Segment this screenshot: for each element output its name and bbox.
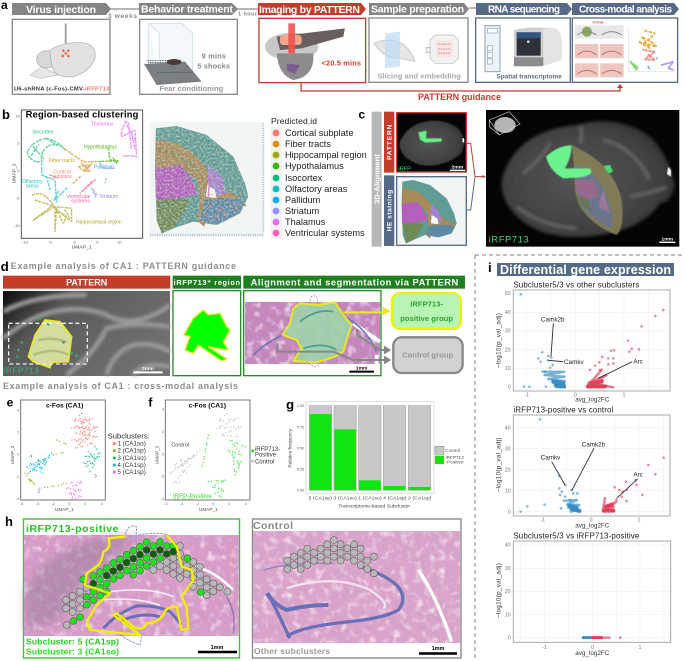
chamber protocol text: 9 mins [202, 52, 226, 61]
step header: RNA sequencing: RNA sequencing [488, 4, 560, 16]
label: iRFP-Positive: iRFP-Positive [173, 493, 212, 500]
volcano plot 3: 0 [591, 645, 594, 651]
legend: predicted id [271, 116, 367, 239]
UMAP plot: -5 [48, 240, 53, 245]
legend: subclusters: 4 (CA1sp) [117, 462, 146, 469]
UMAP plot [11, 109, 143, 250]
volcano plot 1: 0 [508, 384, 511, 390]
panel e: c-Fos UMAP by subcluster: 0 [17, 453, 19, 457]
panel f: c-Fos UMAP by group: 0 [162, 452, 164, 456]
icon: imaging device with laser beam [265, 23, 345, 80]
red points [603, 458, 664, 512]
panel letter c: c [358, 108, 365, 122]
UMAP plot: Region-based clustering [26, 109, 139, 119]
legend: predicted id: Ventricular systems [285, 228, 365, 238]
cluster numbers: 2 [37, 488, 40, 494]
volcano plot 1: 10 [505, 366, 511, 372]
cluster labels: Hippocampal region [76, 220, 122, 226]
cluster labels: Fiber tracts [49, 158, 75, 164]
legend: subclusters: Subclusters: [108, 432, 150, 441]
cluster labels: Striatum [99, 194, 118, 200]
scale bar [419, 646, 457, 654]
cluster labels: Olfactory [22, 179, 43, 185]
gene callouts: Camk2b [582, 442, 606, 449]
panel f: c-Fos UMAP by group: c-Fos (CA1) [189, 403, 226, 410]
volcano plot 3: −log10(p_val_adj) [496, 563, 503, 618]
UMAP plot: 0 [17, 168, 20, 173]
scale bar: 1mm [432, 646, 445, 652]
UMAP plot: -10 [14, 223, 20, 228]
panel g: relative frequency bars: 0.50 [297, 447, 304, 451]
box: virus injection [12, 19, 110, 94]
image: PATTERN volume: iRFP [398, 167, 411, 173]
panel e: c-Fos UMAP by subcluster: UMAP_2 [10, 445, 15, 464]
volcano plot 2: −log10(p_val_adj) [496, 437, 503, 492]
fiber tracts cluster [65, 149, 93, 185]
cluster labels: Cortical [53, 170, 71, 176]
panel f: c-Fos UMAP by group [148, 396, 250, 512]
legend: predicted id: Fiber tracts [285, 139, 331, 149]
legend: predicted id: Pallidum [285, 195, 321, 205]
image: PATTERN close-up [3, 291, 170, 376]
legend: subclusters: 3 (CA1so) [117, 455, 146, 462]
box: cross-modal analysis [572, 18, 678, 82]
scatter: subclusters [25, 413, 100, 500]
cluster labels [22, 121, 122, 226]
legend: predicted id: Striatum [285, 206, 320, 216]
icon: spatial slide [485, 26, 500, 72]
box: behavior treatment: 5 shocks [197, 62, 230, 71]
blue points [583, 633, 593, 642]
tissue image: iRFP713-positive [24, 535, 239, 636]
volcano plot 1 [496, 281, 670, 404]
panel g: relative frequency bars: Transcriptome-based Subcluster [338, 503, 411, 509]
image: merged 3D view [486, 110, 679, 247]
panel e: c-Fos UMAP by subcluster: -4 [16, 497, 19, 501]
legend: group colours [435, 446, 464, 465]
tissue image: control [253, 531, 460, 643]
hippocampal cluster [33, 194, 72, 232]
cluster labels: Hypothalamus [84, 145, 117, 151]
volcano plot 1: 0 [574, 393, 577, 399]
volcano plot 1: 20 [505, 347, 511, 353]
arrows: gray to control group [277, 329, 391, 364]
icon: mouse brain with injection needle [30, 23, 95, 78]
legend: group: Control [255, 459, 274, 465]
gene callouts: Camkv [541, 455, 561, 462]
cortical subplate and ventricular [50, 175, 95, 193]
image: PATTERN close-up: 2mm [142, 366, 154, 372]
step header: virus injection [12, 3, 111, 16]
dashed region outline [120, 526, 168, 645]
thalamus cluster [121, 122, 137, 157]
volcano plot 1: 1 [623, 393, 626, 399]
image: PATTERN volume [397, 113, 466, 173]
volcano plot 1: -1 [524, 393, 529, 399]
bar: HE staining: HE staining [387, 190, 394, 231]
step header: imaging by PATTERN: Imaging by PATTERN [259, 4, 360, 16]
scale bar [349, 369, 374, 375]
legend: subclusters: 5 (CA1sp) [117, 469, 146, 476]
legend: group: iRFP713- [255, 447, 280, 453]
bar: HE staining [384, 175, 394, 246]
volcano plot 2: 30 [505, 446, 511, 452]
gene callouts: Arc [633, 471, 643, 478]
legend: subclusters: 1 (CA1so) [117, 441, 146, 448]
caption: other subclusters: Other subclusters [254, 646, 330, 656]
isocortex cluster [27, 138, 65, 162]
interval label: 3 weeks: 3 weeks [108, 13, 137, 20]
header: PATTERN [3, 276, 170, 289]
legend: predicted id: Cortical subplate [285, 128, 353, 138]
panel g: relative frequency bars: 0.00 [297, 489, 304, 493]
panel f: c-Fos UMAP by group: -2 [196, 502, 199, 506]
image: merged 3D view: 1mm [661, 237, 674, 243]
step header: cross-modal analysis: Cross-modal analysis [579, 4, 672, 16]
panel g: relative frequency bars: g [286, 397, 294, 412]
panel e: c-Fos UMAP by subcluster [7, 396, 105, 512]
box: control group: Control group [402, 351, 453, 360]
header: iRFP713 region: iRFP713⁺ region [174, 278, 240, 287]
subcluster labels [26, 636, 119, 656]
bar: 3D-Alignment: 3D-Alignment [372, 154, 381, 204]
gene callouts: Camkv [564, 359, 585, 366]
legend: subclusters: 2 (CA1sp) [117, 448, 146, 455]
legend: subclusters [108, 432, 150, 476]
volcano plot 2: avg_log2FC [575, 523, 610, 530]
heading: Differential gene expression [500, 263, 671, 277]
panel letter i: i [488, 260, 492, 275]
volcano plot 2: -1 [540, 518, 545, 524]
panel g: relative frequency bars: 5 (CA1sp) 3 (CA1so) 1 (CA1so) 4 (CA1sp) 2 (CA1sp) [309, 496, 432, 502]
caption: slicing and embedding: Slicing and embedding [377, 71, 461, 80]
UMAP plot: 10 [15, 113, 21, 118]
panel c: 3D alignment [358, 108, 679, 247]
volcano plot 3: 1 [638, 645, 641, 651]
subcluster labels: Subcluster: 5 (CA1sp) [26, 636, 119, 646]
cluster labels: areas [26, 183, 39, 189]
bar: 3D-Alignment [372, 112, 382, 247]
UMAP plot: UMAP_1 [72, 244, 92, 250]
UMAP plot: -10 [22, 240, 29, 245]
image: segmented region [173, 291, 241, 376]
labels: Control [171, 443, 189, 449]
volcano plot 2: 0 [508, 509, 511, 515]
cluster labels: Isocortex [32, 130, 54, 136]
image: merged 3D view: iRFP713 [489, 234, 529, 244]
outlying red points [605, 634, 620, 642]
volcano plot 3: 30 [505, 566, 511, 572]
pallidum and striatum [92, 163, 115, 197]
legend: predicted id: Predicted.id [271, 116, 317, 126]
icon: embedding cassette [426, 35, 458, 63]
step header: behavior treatment: Behavior treatment [141, 4, 234, 16]
volcano plot 3: -1 [542, 645, 547, 651]
volcano plot 2: 10 [505, 488, 511, 494]
caption: spatial transcriptome: Spatial transcriptome [497, 74, 562, 81]
legend: group colours: -Positive [446, 460, 464, 465]
box: sample preparation [369, 18, 468, 82]
step header: sample preparation: Sample preparation [371, 4, 464, 16]
box: control group [393, 337, 463, 373]
heading: iRFP713-positive: iRFP713-positive [26, 523, 119, 535]
box: iRFP713-positive group [392, 293, 461, 329]
legend: group [253, 447, 280, 465]
UMAP plot: UMAP_2 [11, 163, 17, 183]
panel e: c-Fos UMAP by subcluster: 0 [68, 502, 70, 506]
spatial brain map [149, 122, 264, 237]
legend: predicted id: Hypothalamus [285, 161, 344, 171]
section dividers [475, 255, 685, 661]
panel b: region-based clustering [2, 107, 367, 250]
mini UMAP [628, 28, 675, 72]
panel f: c-Fos UMAP by group: UMAP_1 [199, 507, 218, 512]
panel e: c-Fos UMAP by subcluster: 2 [84, 502, 86, 506]
red points [593, 633, 602, 642]
blue points [521, 419, 580, 512]
volcano plot 1: −log10(p_val_adj) [496, 313, 503, 368]
panel e: c-Fos UMAP by subcluster: 2 [17, 431, 19, 435]
image: HE staining brain map [397, 177, 466, 245]
cluster labels: Thalamus [91, 121, 114, 127]
volcano plot 3: 40 [505, 543, 511, 549]
panel g: relative frequency bars [286, 397, 464, 509]
panel e: c-Fos UMAP by subcluster: e [7, 396, 14, 410]
image: PATTERN volume: 2mm [452, 165, 464, 171]
volcano plot 3 [496, 532, 671, 657]
volcano plot 2: 20 [505, 468, 511, 474]
box: behavior treatment [140, 19, 237, 94]
box: iRFP713-positive group: positive group [400, 314, 453, 323]
panel h: iRFP713-positive spots on HE [5, 514, 461, 658]
segmentation outline [85, 535, 193, 635]
cluster labels: subplate [52, 174, 72, 180]
arrow head [617, 84, 623, 88]
inset: bounding box [489, 112, 520, 135]
scatter: iRFP713-positive cells [175, 435, 245, 499]
cluster labels: Pallidum [94, 164, 114, 170]
panel f: c-Fos UMAP by group: UMAP_2 [154, 445, 159, 464]
box: imaging by PATTERN [259, 18, 366, 83]
gene callouts [541, 442, 643, 498]
panel f: c-Fos UMAP by group: f [148, 396, 153, 410]
image: PATTERN close-up: iRFP713 [3, 366, 39, 375]
panel f: c-Fos UMAP by group: -4 [161, 497, 164, 501]
mini tissue panels: PATTERN [593, 21, 604, 24]
imaging time label: <20.5 mins [322, 59, 361, 68]
panel f: c-Fos UMAP by group: 2 [162, 430, 164, 434]
volcano plot 3: Subcluster5/3 vs iRFP713-positive [513, 532, 640, 541]
panel e: c-Fos UMAP by subcluster: c-Fos (CA1) [46, 403, 83, 410]
volcano plot 3: 0 [508, 635, 511, 641]
panel e: c-Fos UMAP by subcluster: -2 [16, 475, 19, 479]
header: alignment: Alignment and segmentation via PATTERN [251, 278, 459, 288]
overlay on tissue: 1mm [356, 366, 368, 372]
tissue: HE section in d [245, 296, 380, 372]
volcano plot 1: 50 [505, 291, 511, 297]
legend: predicted id: Olfactory areas [285, 184, 348, 194]
stacked bars [309, 406, 431, 490]
header: PATTERN: PATTERN [66, 277, 107, 287]
blue points [521, 294, 565, 387]
arrow: PATTERN guidance [301, 83, 620, 91]
volcano plot 3: 10 [505, 612, 511, 618]
cluster numbers: 4 [29, 454, 32, 460]
icon: fear conditioning chamber [144, 23, 202, 85]
scale bar: 1mm [211, 645, 224, 651]
olfactory cluster [42, 163, 67, 203]
volcano plot 2: 40 [505, 425, 511, 431]
UMAP plot: -5 [16, 196, 20, 201]
box: iRFP713-positive group: iRFP713- [410, 300, 443, 309]
volcano plot 2: iRFP713-positive vs control [513, 406, 614, 415]
cluster numbers [29, 454, 97, 494]
spots: iRFP713-positive [62, 526, 231, 645]
UMAP plot: 10 [117, 240, 122, 245]
panel g: relative frequency bars: 0.25 [297, 468, 304, 472]
gene callouts: Camk2b [541, 317, 565, 324]
UMAP plot: 5 [96, 240, 99, 245]
panel f: c-Fos UMAP by group: 0 [212, 502, 214, 506]
step header: virus injection: Virus injection [26, 4, 96, 16]
panel a: experimental workflow [1, 0, 679, 102]
panel g: relative frequency bars: 1.00 [297, 404, 304, 408]
legend: predicted id: Thalamus [285, 217, 326, 227]
arrows to merged image [467, 143, 486, 210]
image: HE with segmentation [244, 291, 381, 376]
section title: Example analysis of CA1 : PATTERN guidance [11, 261, 236, 271]
icon: sequencer [514, 27, 562, 67]
header: iRFP713 region [173, 276, 241, 289]
panel f: c-Fos UMAP by group: -4 [180, 502, 183, 506]
box: RNA sequencing [476, 18, 570, 82]
panel e: c-Fos UMAP by subcluster: 4 [101, 502, 103, 506]
panel e: c-Fos UMAP by subcluster: -4 [36, 502, 39, 506]
bar: PATTERN: PATTERN [387, 124, 394, 160]
legend: group colours: iRFP713 [446, 455, 464, 460]
volcano plot 1: 40 [505, 310, 511, 316]
volcano plot 2 [496, 406, 670, 530]
panel e: c-Fos UMAP by subcluster: 4 [17, 408, 19, 412]
overlay: aligned section [572, 145, 623, 235]
UMAP plot: 5 [17, 141, 20, 146]
volcano plot 3: 20 [505, 589, 511, 595]
panel f: c-Fos UMAP by group: 4 [245, 502, 247, 506]
panel letter b: b [2, 107, 10, 122]
panel i: differential gene expression [488, 260, 674, 657]
heading: control: Control [253, 520, 293, 532]
panel g: relative frequency bars: 0.75 [297, 425, 304, 429]
panel d: CA1 PATTERN guidance [1, 259, 465, 376]
arrow: yellow to positive group [343, 307, 391, 316]
hypothalamus cluster [95, 148, 118, 163]
section title: cross-modal analysis: Example analysis of CA1 : cross-modal analysis [3, 381, 238, 391]
caption: fear conditioning: Fear conditioning [159, 84, 224, 93]
panel f: c-Fos UMAP by group: 4 [162, 407, 164, 411]
cluster numbers: 3 [94, 473, 97, 479]
panel e: c-Fos UMAP by subcluster: -6 [20, 502, 23, 506]
scatter: control cells [170, 413, 242, 483]
volcano plot 1: Subcluster5/3 vs other subclusters [513, 281, 639, 290]
volcano plot 2: 1 [637, 518, 640, 524]
label: PATTERN guidance: PATTERN guidance [418, 92, 501, 102]
volcano plot 3: avg_log2FC [575, 650, 610, 657]
volcano plot 1: 30 [505, 329, 511, 335]
frame: control [252, 519, 461, 658]
UMAP plot: 0 [74, 240, 77, 245]
panel f: c-Fos UMAP by group: 2 [228, 502, 230, 506]
subcluster labels: Subcluster: 3 (CA1so) [26, 646, 119, 656]
step header: RNA sequencing [476, 3, 572, 16]
icon: brain slicing [374, 32, 415, 68]
panel e: c-Fos UMAP by subcluster: -2 [52, 502, 55, 506]
scale bar [198, 645, 237, 652]
panel letter h: h [5, 514, 13, 529]
group boxes and arrows [277, 293, 463, 373]
panel g: relative frequency bars: Relative frequency [287, 428, 292, 468]
spots: control [284, 536, 377, 577]
volcano plot 1: avg_log2FC [575, 397, 610, 404]
panel f: c-Fos UMAP by group: -2 [161, 475, 164, 479]
panel letter d: d [1, 259, 9, 274]
panel f: c-Fos UMAP by group: -6 [164, 502, 168, 506]
panel e: c-Fos UMAP by subcluster: UMAP_1 [55, 507, 74, 512]
frame: iRFP713-positive [24, 519, 240, 658]
bar: PATTERN [384, 112, 394, 173]
signal: iRFP713 [546, 145, 671, 178]
virus construct label: U6-shRNA (c-Fos)-CMV-iRFP713 [14, 87, 110, 93]
legend: group colours: Control [445, 448, 460, 453]
legend: predicted id: Hippocampal region [285, 150, 367, 160]
cluster labels: Ventricular [66, 194, 91, 200]
connector lines [110, 8, 476, 9]
gene callouts: Arc [633, 359, 643, 366]
cluster labels: systems [71, 198, 90, 204]
volcano plot 2: 0 [590, 518, 593, 524]
interval label: 1 hour: 1 hour [238, 12, 258, 18]
gene callouts [541, 317, 643, 378]
red points [587, 310, 663, 387]
legend: predicted id: Isocortex [285, 173, 323, 183]
legend: group: Positive [255, 452, 277, 458]
